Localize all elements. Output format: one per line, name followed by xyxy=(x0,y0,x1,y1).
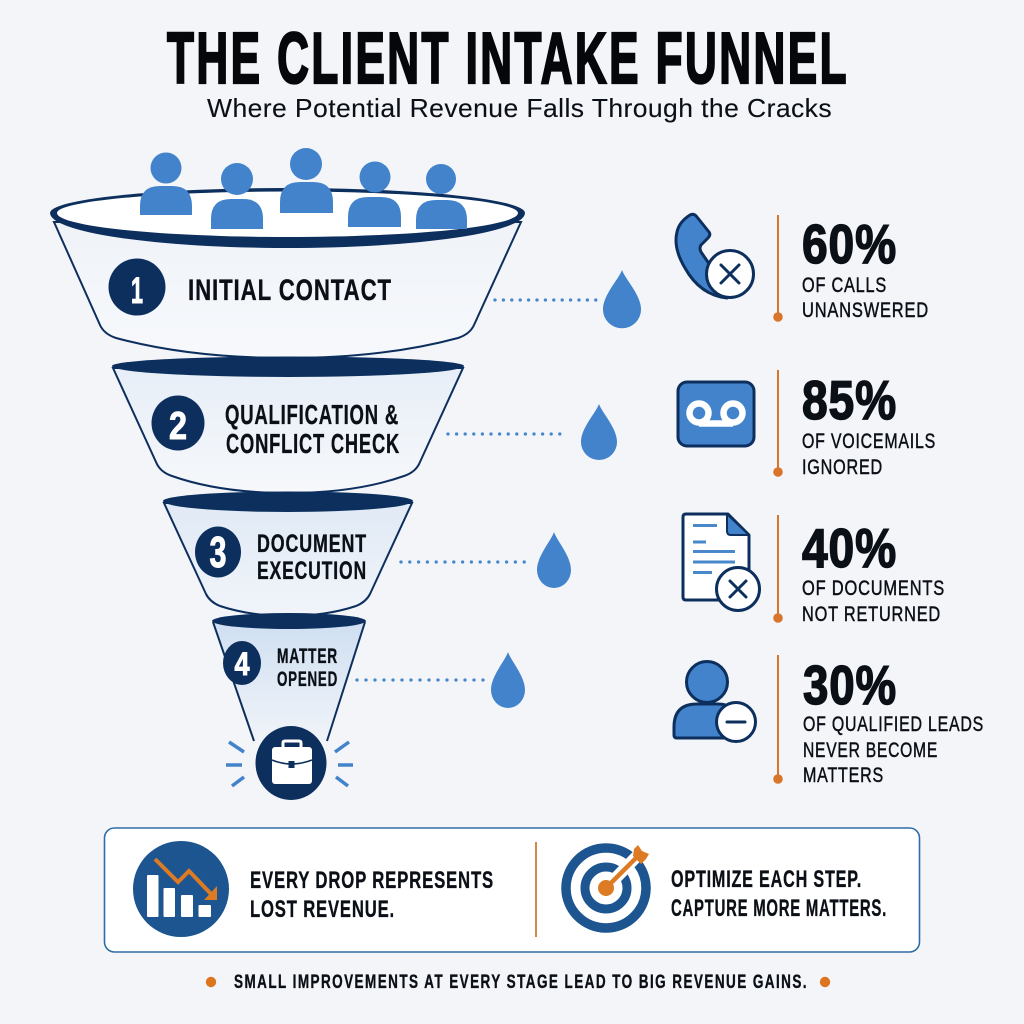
drop 4 xyxy=(357,652,525,708)
stat: calls unanswered xyxy=(676,213,929,322)
funnel diagram xyxy=(50,148,525,800)
funnel stage 2: qualification and conflict check xyxy=(112,357,464,493)
stat: calls unanswered: UNANSWERED xyxy=(802,299,929,322)
funnel stage 1: initial contact xyxy=(50,188,525,358)
funnel stage 1: initial contact: 1 xyxy=(131,270,143,311)
leak lines and drops xyxy=(357,270,641,708)
funnel stage 4: matter opened: MATTER xyxy=(277,645,338,668)
panel: takeaways xyxy=(104,828,920,952)
drop 1 xyxy=(495,270,641,328)
stat: qualified leads lost: NEVER BECOME xyxy=(803,739,938,762)
stat: qualified leads lost xyxy=(674,654,984,787)
funnel stage 2: qualification and conflict check: CONFLICT CHECK xyxy=(226,428,400,459)
funnel stage 1: initial contact: INITIAL CONTACT xyxy=(188,274,392,307)
takeaway text: optimize xyxy=(671,866,887,922)
icon: person with minus xyxy=(674,662,756,742)
funnel stage 3: document execution: DOCUMENT xyxy=(257,530,367,558)
stat: documents not returned: NOT RETURNED xyxy=(802,603,941,626)
funnel stage 2: qualification and conflict check: 2 xyxy=(169,405,187,448)
funnel stage 4: matter opened: 4 xyxy=(234,646,250,682)
funnel stage 4: matter opened: OPENED xyxy=(277,668,338,691)
icon: phone with x xyxy=(676,214,754,298)
stat: documents not returned xyxy=(683,514,945,626)
drop 2 xyxy=(448,404,617,460)
icon: declining bar chart xyxy=(133,841,229,937)
stat: voicemails ignored xyxy=(678,369,936,479)
subtitle: Where Potential Revenue Falls Through the Cracks xyxy=(207,93,832,123)
funnel stage 4: matter opened xyxy=(212,613,366,741)
funnel stage 2: qualification and conflict check: QUALIFICATION & xyxy=(225,399,399,430)
takeaway text: lost revenue: LOST REVENUE. xyxy=(250,896,395,923)
stat: calls unanswered: OF CALLS xyxy=(802,274,887,297)
icon: target with arrow xyxy=(566,845,649,928)
drop 3 xyxy=(401,532,571,588)
stat: voicemails ignored: 85% xyxy=(802,369,897,431)
stat: documents not returned: OF DOCUMENTS xyxy=(802,577,945,600)
people entering the funnel xyxy=(140,148,467,229)
takeaway text: optimize: OPTIMIZE EACH STEP. xyxy=(671,866,862,893)
stat: documents not returned: 40% xyxy=(802,517,897,579)
stat: voicemails ignored: IGNORED xyxy=(802,456,883,479)
funnel stage 3: document execution: EXECUTION xyxy=(257,557,367,585)
takeaway text: lost revenue xyxy=(250,867,494,923)
footer note: SMALL IMPROVEMENTS AT EVERY STAGE LEAD TO BIG REVENUE GAINS. xyxy=(234,972,808,993)
funnel stage 3: document execution xyxy=(163,492,413,616)
stat: qualified leads lost: 30% xyxy=(803,654,897,716)
icon: voicemail xyxy=(678,382,754,446)
stat: qualified leads lost: MATTERS xyxy=(803,764,884,787)
icon: briefcase outcome xyxy=(226,726,353,800)
stat: calls unanswered: 60% xyxy=(802,213,897,275)
takeaway text: lost revenue: EVERY DROP REPRESENTS xyxy=(250,867,494,894)
stat: voicemails ignored: OF VOICEMAILS xyxy=(802,430,936,453)
funnel stage 3: document execution: 3 xyxy=(210,528,226,577)
icon: document with x xyxy=(683,514,760,610)
takeaway text: optimize: CAPTURE MORE MATTERS. xyxy=(671,895,887,922)
